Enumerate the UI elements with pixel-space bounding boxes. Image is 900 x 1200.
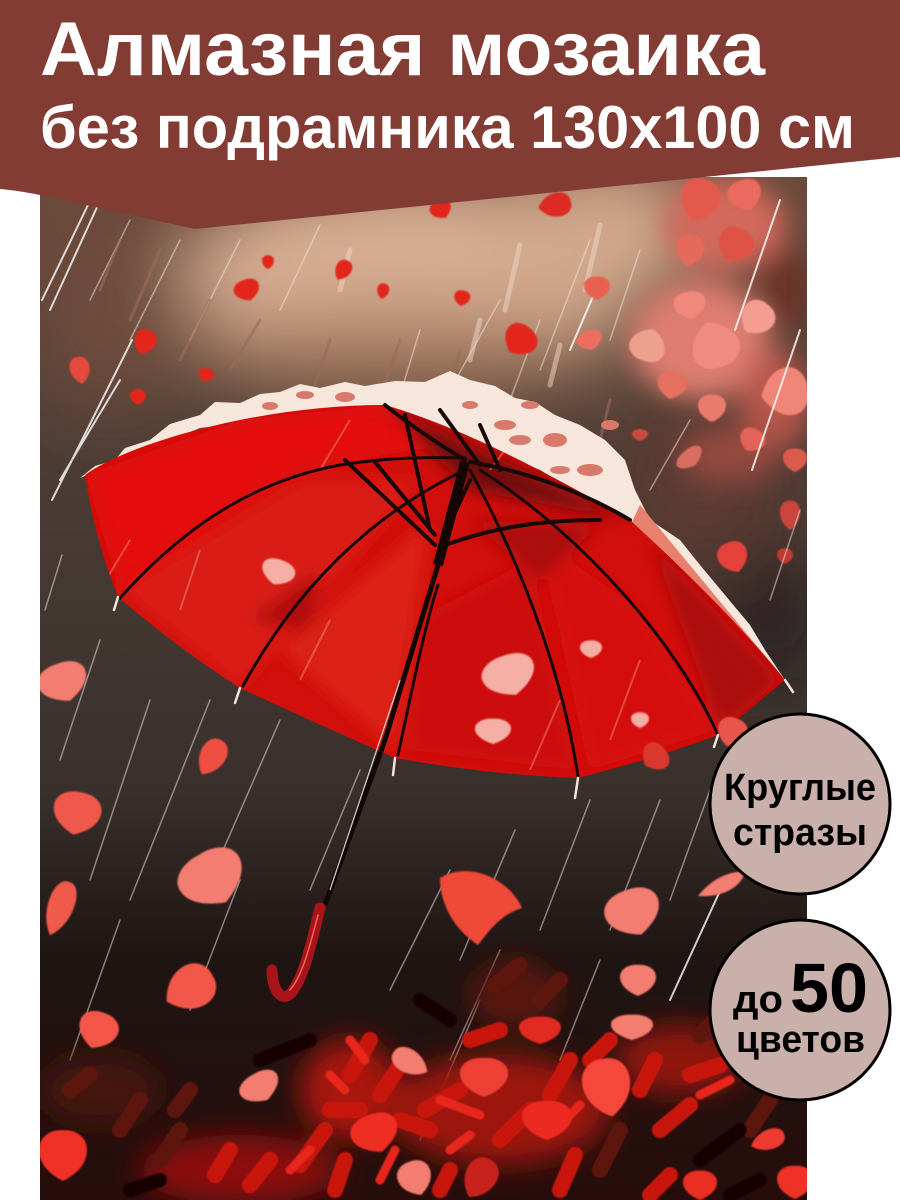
umbrella ribs [120,405,717,776]
header banner [0,0,900,229]
umbrella [80,371,800,996]
rim drips [114,597,793,798]
title line 2: без подрамника 130х100 см [40,94,855,161]
badge: round rhinestones: стразы [733,812,867,854]
umbrella white top edge [80,371,785,680]
badge: up to 50 colours [710,920,890,1100]
dark flowers foreground [40,960,770,1200]
badge: round rhinestones: Круглые [724,767,876,809]
umbrella handle [272,908,320,996]
falling petals [33,190,813,1200]
badge: up to 50 colours: 50 [790,949,868,1027]
blossoms top right [626,173,812,564]
painting: red umbrella in the rain [33,160,820,1200]
title line 1: Алмазная мозаика [40,7,766,92]
umbrella shaft [325,462,465,905]
badge: up to 50 colours: до [733,979,783,1021]
large coral petal [440,871,522,945]
umbrella canopy [80,400,800,790]
title [40,7,855,161]
badge: round rhinestones [710,714,890,894]
painting background tones [40,160,820,690]
badge: up to 50 colours: цветов [736,1019,865,1061]
rain streaks [42,200,800,1140]
